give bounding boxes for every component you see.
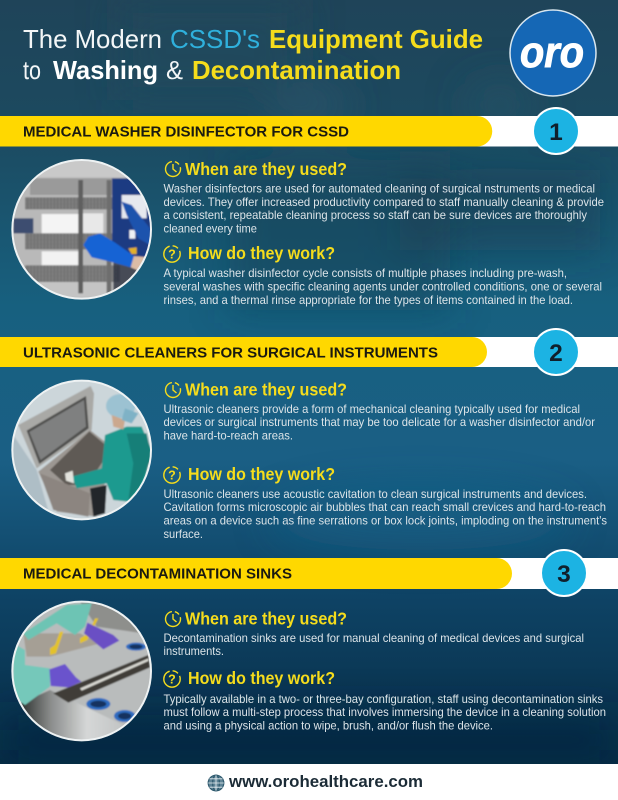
section 2 when heading: When are they used? [185, 380, 347, 400]
section 3 how text: and using a physical action to wipe, brush, and/or flush the device. [164, 720, 493, 733]
icon: clock [166, 612, 180, 626]
icon: question: ? [168, 468, 176, 482]
section 2 how text: Ultrasonic cleaners use acoustic cavitation to clean surgical instruments and devices. [164, 488, 587, 501]
section 3 banner: MEDICAL DECONTAMINATION SINKS [23, 566, 292, 582]
section 3 banner: 3 [557, 561, 571, 588]
section 2 when text [164, 403, 595, 443]
section 2 when text: have hard-to-reach areas. [164, 430, 293, 443]
section 3 banner [0, 550, 618, 596]
section 2 how text: Cavitation forms microscopic air bubbles that can reach small crevices and hard-to-reach [164, 501, 606, 514]
section 2 how text: surface. [164, 528, 203, 541]
footer: www.orohealthcare.com [228, 772, 423, 791]
icon: question: ? [168, 248, 176, 262]
section 3 when text: instruments. [164, 645, 224, 658]
section 3 how text: Typically available in a two- or three-bay configuration, staff using decontamination sinks [164, 693, 603, 706]
section 1 when text: a consistent, repeatable cleaning process so staff can be sure devices are thoroughly [164, 209, 587, 222]
section 1 when text: devices. They offer increased productivity compared to staff manually cleaning & provide [164, 196, 604, 209]
section 1 when text: cleaned every time [164, 223, 257, 236]
icon: globe [208, 775, 224, 791]
section 2 how text [164, 488, 607, 541]
icon: question [164, 467, 180, 483]
section 3 how text [164, 693, 606, 733]
section 3 how heading: How do they work? [188, 668, 335, 688]
section 2 banner: 2 [549, 340, 563, 367]
section 1 when text [164, 182, 604, 236]
section 1 how text: rinses, and a thermal rinse appropriate for the types of items contained in the load. [164, 294, 573, 307]
title: Decontamination [192, 55, 401, 85]
section 3 when text: Decontamination sinks are used for manual cleaning of medical devices and surgical [164, 632, 584, 645]
section 2 how heading: How do they work? [188, 464, 335, 484]
icon: question [164, 246, 180, 262]
title: Washing [53, 55, 158, 85]
logo: oro: oro [520, 28, 584, 77]
icon: clock [166, 162, 180, 176]
title: to [23, 55, 41, 85]
icon: question [164, 671, 180, 687]
title: & [166, 55, 183, 85]
section 2 when text: devices or surgical instruments that may be too delicate for a washer disinfector and/or [164, 416, 595, 429]
title: CSSD's [170, 24, 260, 54]
section 1 when text: Washer disinfectors are used for automated cleaning of surgical nstruments or medical [164, 182, 595, 195]
section 1 photo: washer disinfector [10, 157, 153, 303]
section 1 how text [164, 267, 602, 307]
section 1 banner: MEDICAL WASHER DISINFECTOR FOR CSSD [23, 124, 349, 140]
section 1 how heading: How do they work? [188, 243, 335, 263]
section 3 when text [164, 632, 584, 658]
section 1 banner: 1 [549, 119, 563, 146]
section 2 when text: Ultrasonic cleaners provide a form of mechanical cleaning typically used for medical [164, 403, 580, 416]
icon: question: ? [168, 672, 176, 686]
section 2 banner: ULTRASONIC CLEANERS FOR SURGICAL INSTRUMENTS [23, 344, 438, 362]
section 2 banner [0, 329, 618, 375]
section 1 how text: A typical washer disinfector cycle consists of multiple phases including pre-wash, [164, 267, 567, 280]
title: Equipment Guide [269, 24, 483, 54]
section 3 photo: decontamination sink [10, 597, 153, 747]
section 1 when heading: When are they used? [185, 159, 347, 179]
section 2 photo: ultrasonic cleaner [10, 377, 153, 523]
section 3 how text: must follow a multi-step process that involves immersing the device in a cleaning solution [164, 706, 606, 719]
footer [0, 764, 618, 800]
section 3 when heading: When are they used? [185, 608, 347, 628]
title: The Modern [23, 24, 162, 54]
section 2 how text: areas on a device such as fine serrations or box lock joints, imploding on the instrument's [164, 515, 607, 528]
icon: clock [166, 382, 180, 398]
title [23, 24, 483, 85]
logo: oro [510, 10, 596, 96]
section 1 how text: several washes with specific cleaning agents under controlled conditions, one or several [164, 280, 602, 294]
section 1 banner [0, 108, 618, 154]
